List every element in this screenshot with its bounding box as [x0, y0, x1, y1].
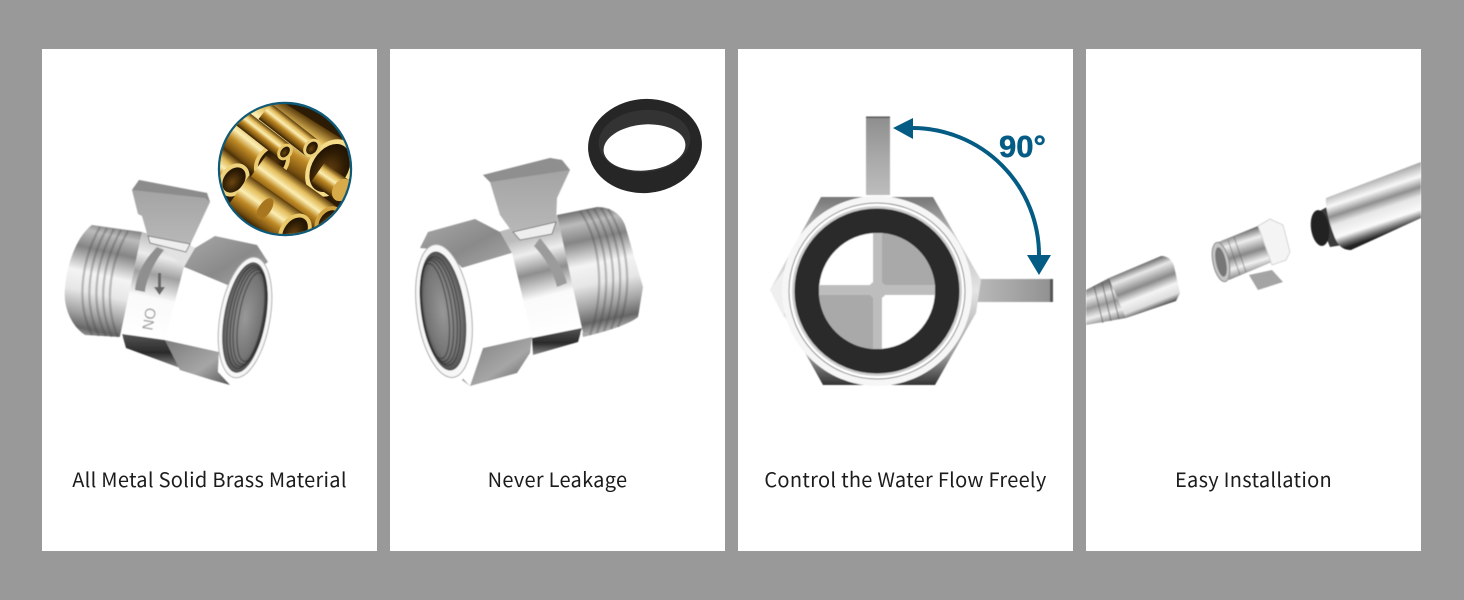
valve: front view — [770, 116, 1053, 386]
caption: brass material: All Metal Solid Brass Material — [72, 464, 347, 493]
panel: never leakage — [390, 49, 725, 551]
flow direction arrow — [154, 273, 165, 295]
illustration layer — [64, 98, 1422, 386]
etched scale on valve — [135, 247, 164, 292]
caption: easy installation: Easy Installation — [1175, 464, 1332, 493]
ON engraving: ON — [138, 306, 159, 331]
panel: water flow control — [738, 49, 1073, 551]
caption: water flow control: Control the Water Flow Freely — [764, 464, 1047, 493]
panel: easy installation — [1086, 49, 1421, 551]
inset: brass tubes — [218, 102, 352, 236]
handle: right position — [972, 279, 1053, 302]
caption: never leakage: Never Leakage — [488, 464, 627, 493]
valve: panel 1 chrome valve — [65, 180, 280, 385]
hose end: left — [1086, 256, 1180, 325]
valve: panel 2 chrome valve — [408, 158, 643, 386]
hose end: right — [1309, 162, 1421, 250]
handle: up position — [866, 117, 890, 195]
arrow: 90 degree rotation — [893, 118, 1051, 275]
rubber seal ring — [807, 221, 947, 361]
panel: brass material — [42, 49, 377, 551]
valve: small connector — [1209, 219, 1290, 290]
label: 90 degrees: 90° — [999, 129, 1046, 164]
icon: rubber washer — [584, 94, 706, 198]
flow opening with cross — [819, 233, 935, 349]
etched scale on valve — [534, 238, 567, 287]
